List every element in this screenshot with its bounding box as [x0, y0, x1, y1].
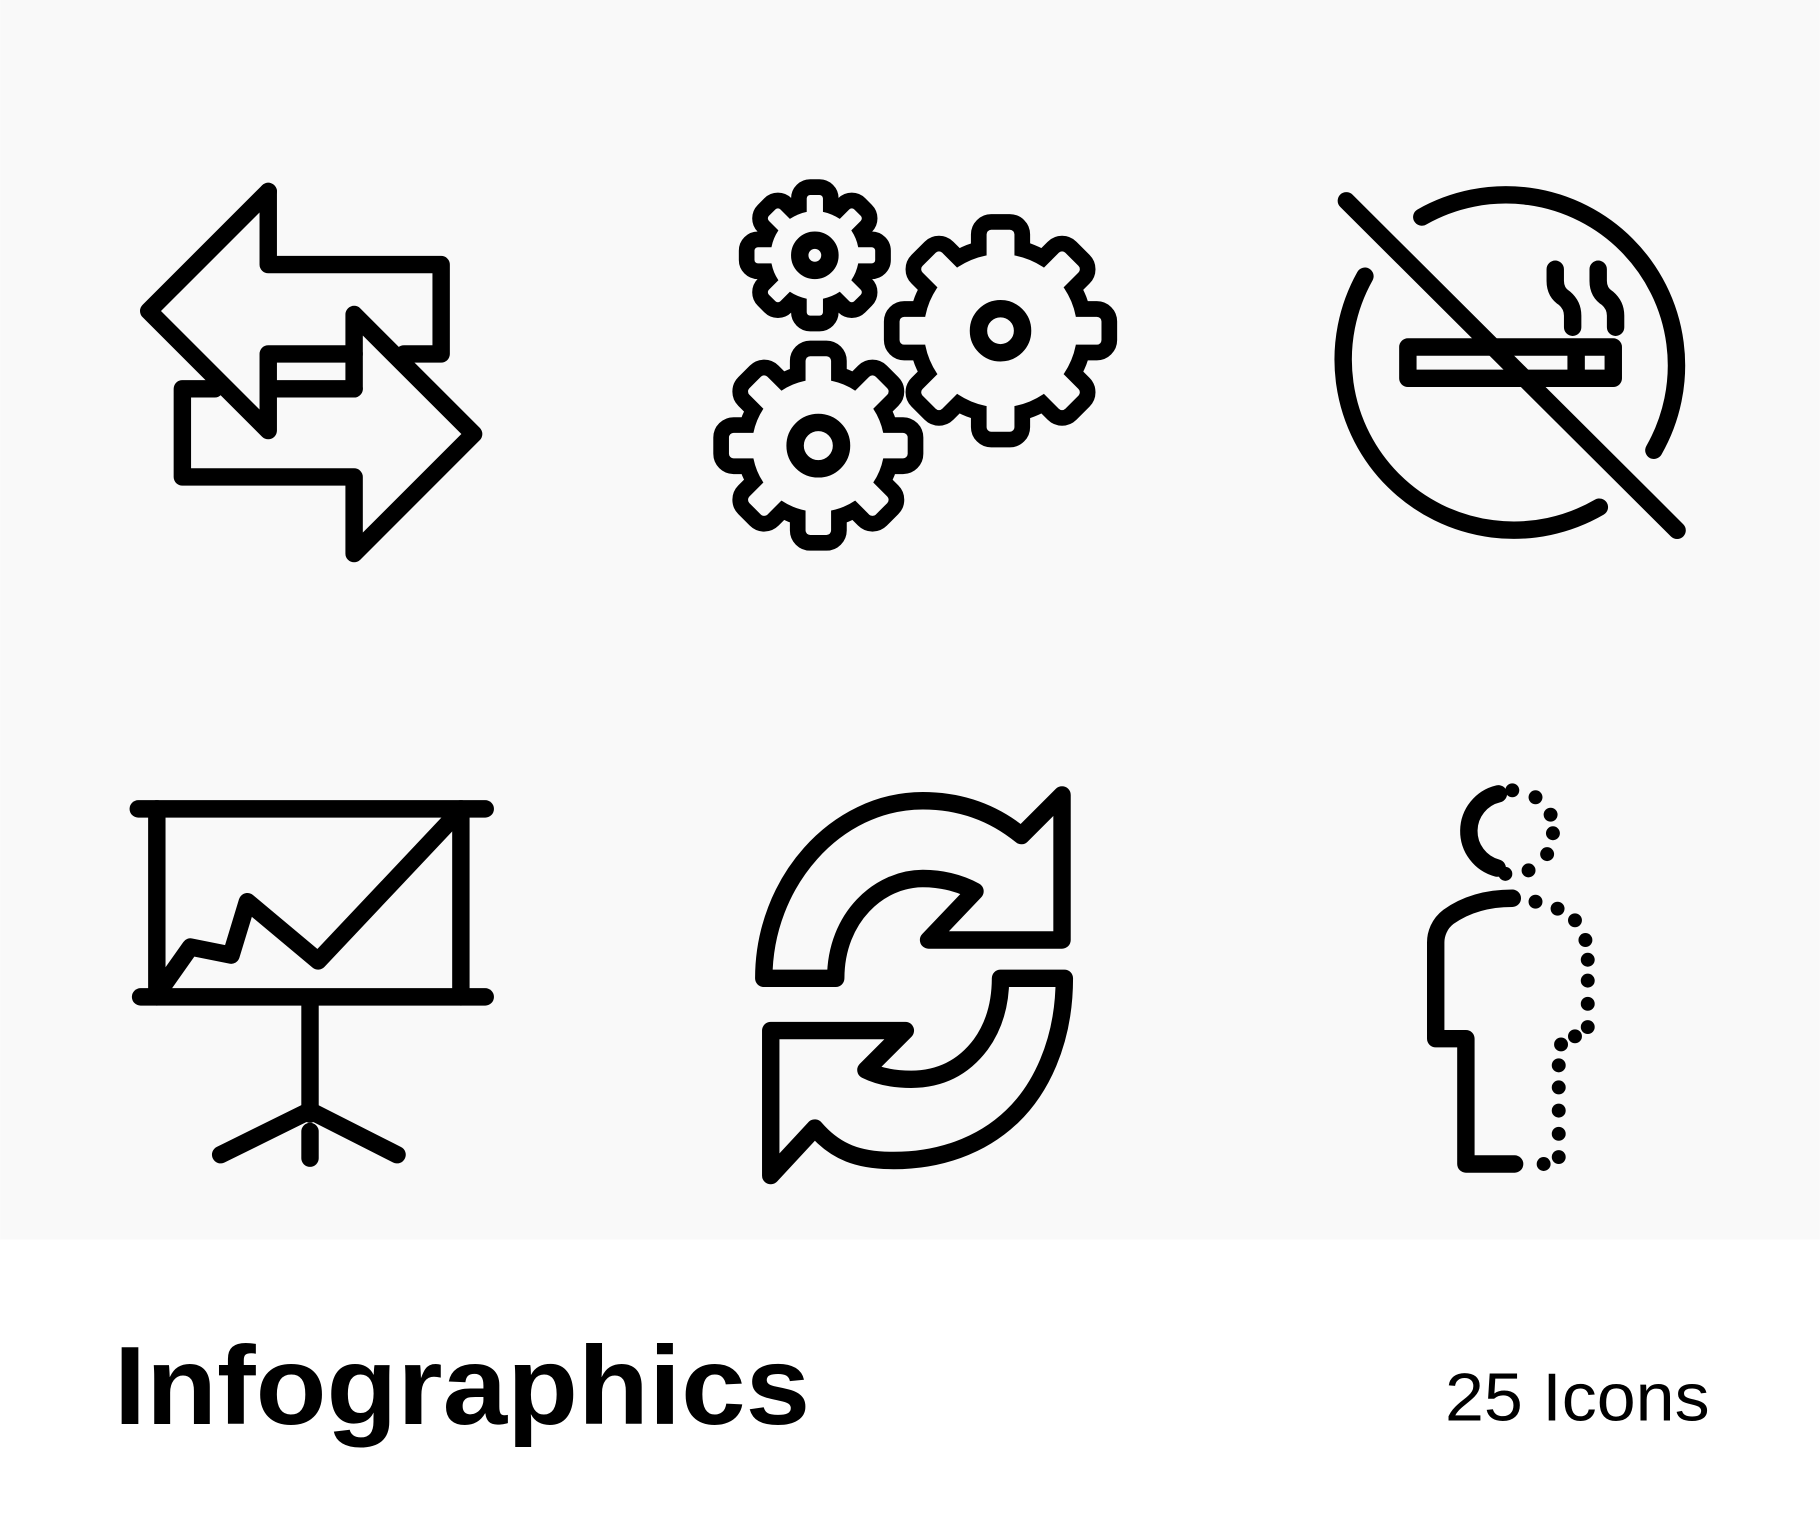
icon: presentation board	[138, 809, 485, 1158]
icon: no smoking	[1343, 195, 1677, 530]
title: Infographics	[114, 1323, 810, 1448]
gear: medium	[729, 356, 908, 535]
icon count: 25 Icons	[1445, 1360, 1710, 1435]
gear: small	[754, 195, 875, 316]
icon: person with dotted outline	[1436, 783, 1595, 1171]
icon: gears	[729, 195, 1101, 535]
icon: exchange arrows	[149, 191, 474, 554]
icon: refresh arrows	[764, 795, 1064, 1176]
gear: big	[900, 230, 1101, 432]
